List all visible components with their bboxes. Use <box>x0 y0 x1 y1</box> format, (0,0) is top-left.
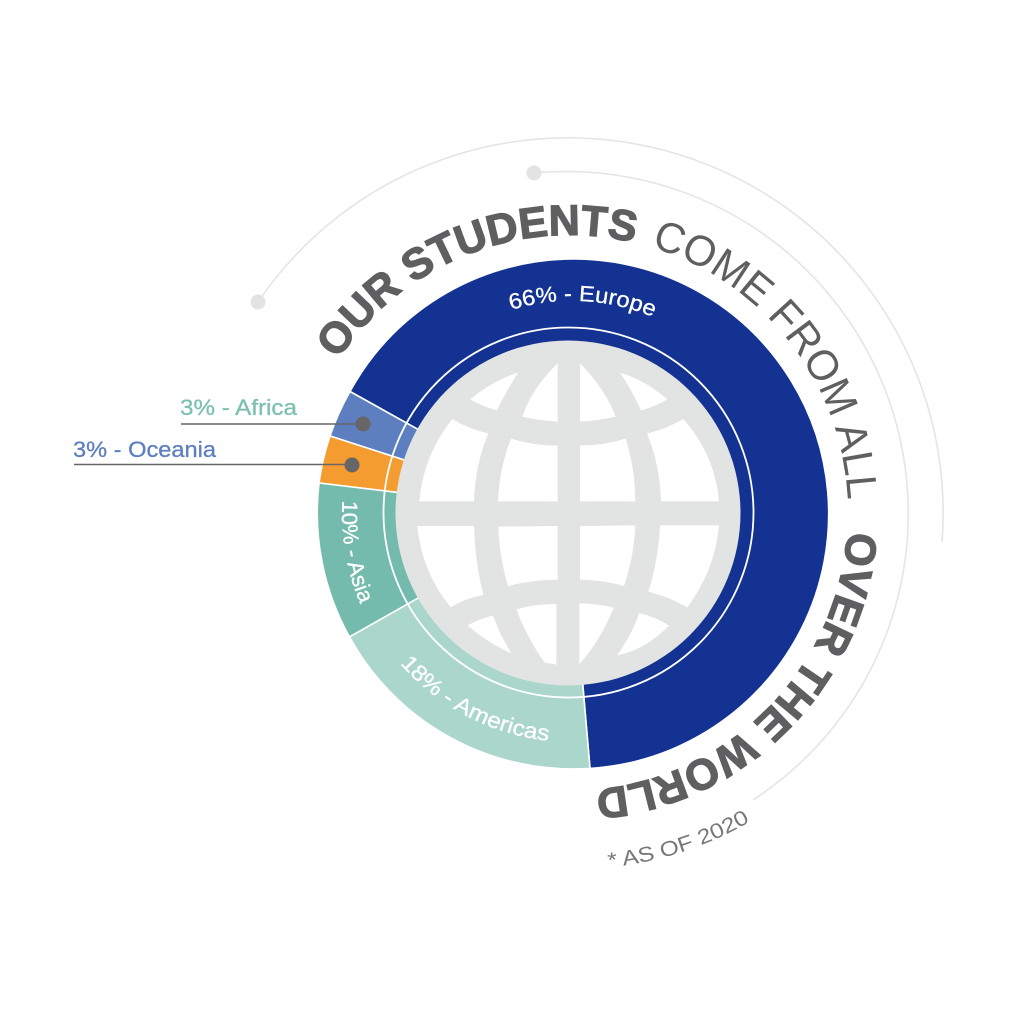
callout: Oceania <box>73 437 360 472</box>
label: 66% Europe: 66% - Europe <box>510 286 655 316</box>
label: 18% Americas: 18% - Americas <box>401 656 549 740</box>
curved title: OUR STUDENTS COME FROM ALL OVER THE WORLD <box>320 204 876 818</box>
label: 10% Asia: 10% - Asia <box>342 502 371 604</box>
segment: Europe 66% <box>350 259 829 768</box>
inner white ring <box>384 328 754 698</box>
callout: Africa: 3% - Africa <box>180 395 298 420</box>
callout: Africa <box>180 395 370 432</box>
inner decorative arc with dot <box>526 166 908 800</box>
callout: Oceania: 3% - Oceania <box>73 437 217 462</box>
segment: Oceania 3% <box>319 436 568 513</box>
segment: Asia 10% <box>317 483 568 637</box>
outer decorative arc with dot <box>250 138 943 542</box>
icon: globe <box>396 340 740 686</box>
segment: Americas 18% <box>350 513 590 769</box>
footnote: * AS OF 2020 <box>608 811 748 866</box>
segment: Africa 3% <box>330 392 568 513</box>
donut chart <box>317 259 829 769</box>
